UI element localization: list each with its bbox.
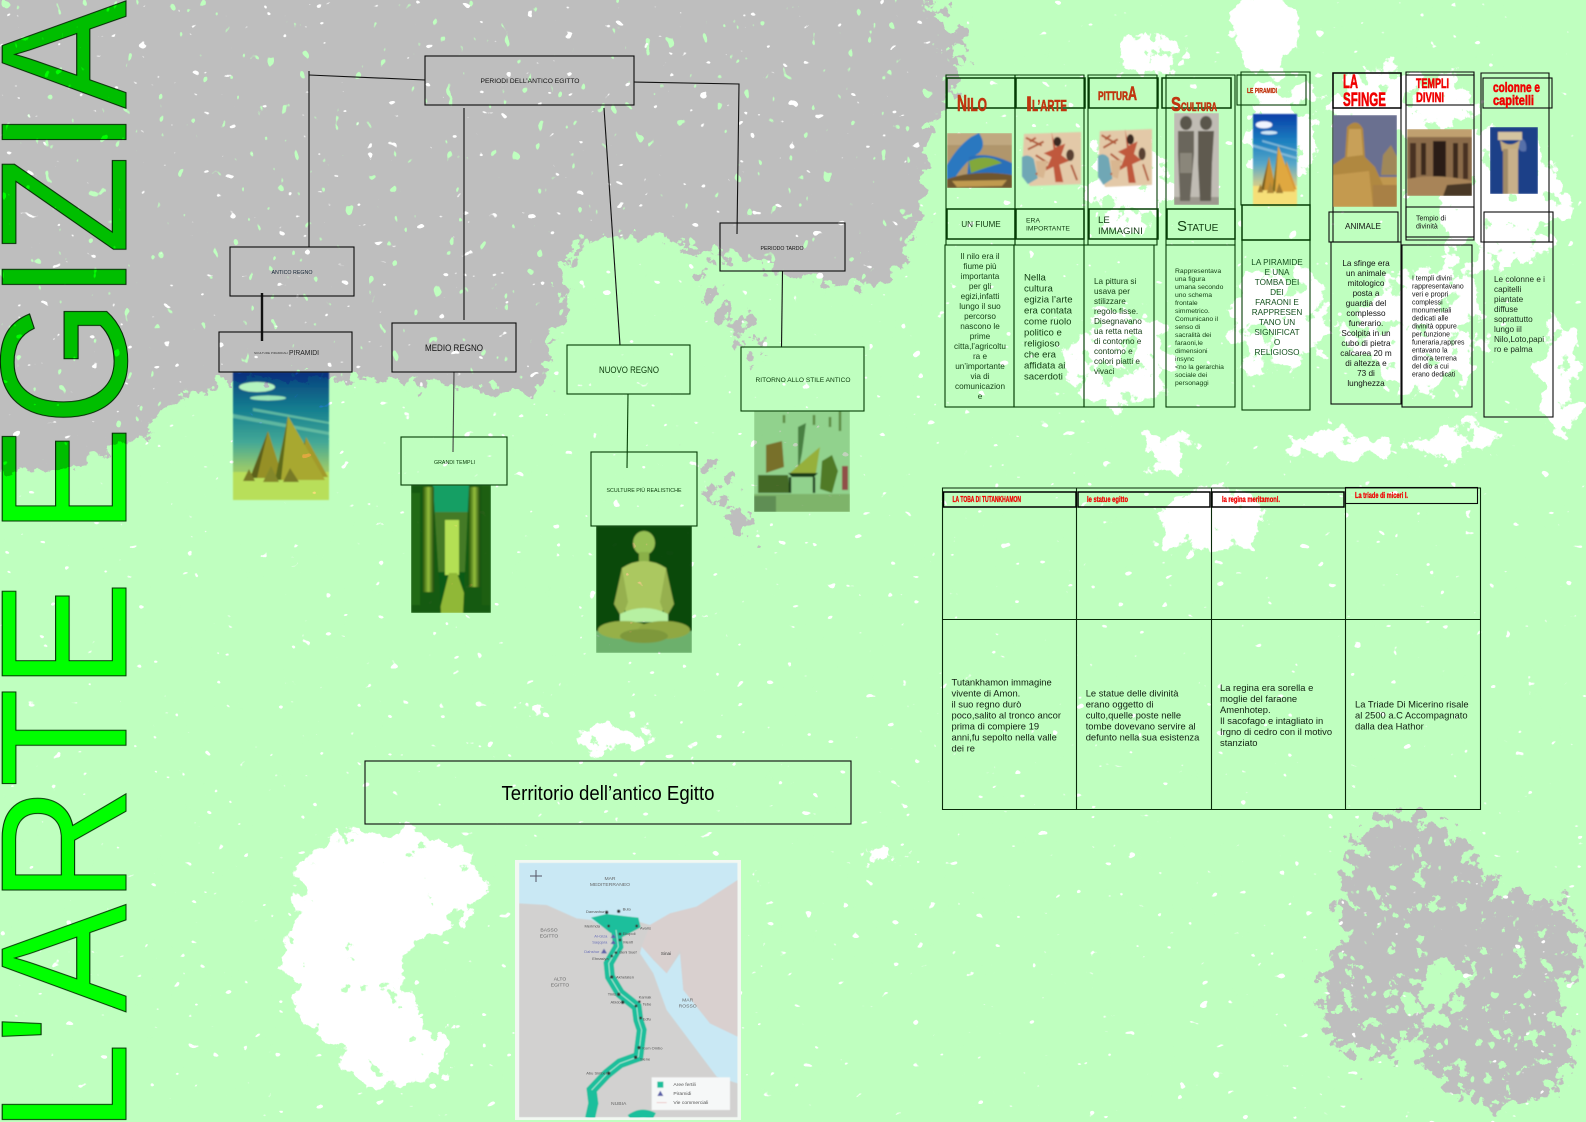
column 3: queen Meritamon: Irgno di cedro con il motivo (1220, 726, 1332, 737)
text: colonne (1484, 242, 1553, 417)
column 4: triad of Mycerinus: dalla dea Hathor (1355, 720, 1424, 731)
column 1: tomb of Tutankhamon: prima di compiere 19 (952, 720, 1039, 731)
node: antico regno: ANTICO REGNO (272, 270, 313, 276)
title: colonne e capitelli: capitelli (1493, 92, 1534, 108)
text: nilo: ra e (973, 352, 988, 361)
text: sfinge: Scolpita in un (1341, 329, 1391, 338)
subtitle: le immagini: IMMAGINI (1098, 226, 1143, 237)
title: scultura: S (1171, 94, 1181, 116)
node: ritorno allo stile antico: RITORNO ALLO STILE ANTICO (756, 377, 851, 384)
text: arte: affidata ai (1024, 360, 1065, 372)
text: templi: I templi divini (1412, 276, 1452, 282)
column 2: statues: culto,quelle poste nelle (1086, 709, 1181, 720)
text: sfinge: lunghezza (1347, 379, 1385, 388)
title: colonne e capitelli: colonne e (1493, 79, 1540, 95)
image: couple statue (1174, 113, 1219, 205)
map of ancient Egypt: Ehnasiya (592, 956, 609, 961)
column 4: triad of Mycerinus: al 2500 a.C Accompagnato (1355, 709, 1468, 720)
column 2: statues: erano oggetto di (1086, 698, 1153, 709)
map of ancient Egypt: Siene (640, 1056, 651, 1061)
map of ancient Egypt: Saqqara (592, 940, 608, 945)
image: pyramids left (233, 372, 329, 500)
title: pittura: A (1128, 84, 1137, 105)
title: nilo: ILO (967, 95, 987, 115)
map of ancient Egypt: Eliopoli (623, 931, 636, 936)
text: colonne: piantate (1494, 295, 1524, 304)
node: nuovo regno (567, 345, 690, 394)
map of ancient Egypt: MAR (604, 876, 616, 882)
text: sfinge: La sfinge era (1342, 259, 1390, 268)
subtitle: animale: ANIMALE (1345, 222, 1382, 231)
column 2: statues: le statue egitto (1087, 495, 1128, 504)
column 1: tomb of Tutankhamon (944, 492, 1076, 753)
title: le piramidi: LE PIRAMIDI (1247, 88, 1277, 95)
text: arte: cultura (1024, 284, 1053, 294)
text: nilo: fiume più (963, 262, 997, 271)
text: pittura (1084, 245, 1154, 407)
text: nilo: citta,l’agricoltu (954, 342, 1006, 351)
text: templi (1402, 245, 1472, 407)
title: la sfinge: SFINGE (1343, 90, 1386, 111)
text: scultura: <no la gerarchia (1175, 364, 1224, 371)
map of ancient Egypt: Tinis (608, 991, 616, 996)
text: pittura: di contorno e (1094, 337, 1142, 346)
text: sfinge: cubo di pietra (1341, 339, 1391, 348)
subtitle: tempio di divinità: Tempio di (1416, 216, 1446, 222)
panel: nilo (945, 75, 1015, 407)
map of ancient Egypt: ALTO (554, 977, 566, 983)
map of ancient Egypt: Tebe (643, 1001, 652, 1006)
map of ancient Egypt: Abu Simbel (586, 1071, 607, 1076)
map of ancient Egypt: Beni Suef (619, 950, 638, 955)
title: arte: L’ARTE (1032, 98, 1067, 115)
text: piramide: TOMBA DEI (1255, 278, 1299, 287)
column 4: triad of Mycerinus: La triade di miceri I. (1355, 491, 1408, 500)
text: piramide: LA PIRAMIDE (1251, 258, 1303, 267)
text: arte: era contata (1024, 306, 1073, 316)
text: pittura: vivaci (1094, 367, 1115, 376)
column 1: tomb of Tutankhamon: Tutankhamon immagine (952, 676, 1052, 687)
column 2: statues: defunto nella sua esistenza (1086, 731, 1200, 742)
text: pittura: stilizzare (1094, 297, 1126, 306)
text: scultura: una figura (1175, 276, 1205, 283)
image: pyramids (1253, 114, 1297, 206)
text: pittura: usava per (1094, 287, 1130, 296)
map of ancient Egypt: Buto (623, 906, 632, 911)
text: templi: del dio a cui (1412, 364, 1449, 370)
text: templi: complessi (1412, 300, 1443, 306)
subtitle: tempio di divinità (1406, 207, 1474, 237)
text: scultura: Comunicano il (1175, 316, 1219, 323)
title: la sfinge: LA (1343, 72, 1358, 93)
column 4: triad of Mycerinus (1346, 488, 1478, 731)
subtitle box: empty (1484, 212, 1553, 242)
map of ancient Egypt: MAR (682, 998, 694, 1004)
node: sculture più realistiche (591, 452, 697, 526)
text: piramide: FARAONI E (1255, 298, 1299, 307)
text: sfinge: guardia del (1346, 299, 1386, 308)
compass (530, 870, 542, 882)
text: scultura (1166, 245, 1235, 407)
text: scultura: dimensioni (1175, 348, 1208, 355)
table: works of Egyptian art (942, 488, 1480, 810)
text: scultura: sacralità dei (1175, 332, 1212, 339)
panel: piramidi (1237, 72, 1310, 410)
panel: territory heading (365, 761, 851, 824)
text: arte: che era (1024, 350, 1057, 360)
column 3: queen Meritamon: la regina meritamonl. (1222, 495, 1280, 504)
node: piramidi: SCULTURE PIRAMIDALI (254, 351, 288, 355)
text: colonne: capitelli (1494, 285, 1521, 294)
text: colonne: Nilo,Loto,papi (1494, 335, 1544, 344)
text: scultura: senso di (1175, 324, 1201, 331)
panel: templi divini (1402, 72, 1474, 407)
text: scultura: frontale (1175, 300, 1198, 307)
image: temple (1407, 129, 1472, 196)
text: piramide: RAPPRESEN (1252, 308, 1302, 317)
text: arte: politico e (1024, 328, 1062, 338)
image: nile river (947, 133, 1012, 188)
text: arte (1014, 245, 1084, 407)
subtitle: statue: STATUE (1177, 218, 1219, 235)
text: colonne: ro e palma (1494, 345, 1533, 354)
text: piramide: SIGNIFICAT (1254, 328, 1300, 337)
text: scultura: umana secondo (1175, 284, 1224, 291)
text: nilo: e (978, 392, 983, 401)
image: fresco (1022, 132, 1081, 186)
image: fresco (1098, 129, 1152, 187)
text: nilo: importanta (961, 272, 1000, 281)
column 1: tomb of Tutankhamon: anni,fu sepolto nella valle (952, 731, 1057, 742)
column 2: statues: Le statue delle divinità (1086, 687, 1179, 698)
subtitle: era importante: ERA (1026, 218, 1040, 224)
text: piramide (1242, 240, 1310, 410)
text: templi: erano dedicati (1412, 372, 1456, 378)
text: piramide: TANO UN (1259, 318, 1295, 327)
text: scultura: insync (1175, 356, 1195, 363)
text: nilo: via di (970, 372, 990, 381)
image: painted scene (754, 412, 850, 512)
text: nilo: prime (970, 332, 991, 341)
text: pittura: regolo fisse. (1094, 307, 1138, 316)
map of ancient Egypt: Al-Giza (594, 933, 608, 938)
text: pittura: La pittura si (1094, 277, 1137, 286)
map of ancient Egypt: Aree fertili (673, 1082, 696, 1088)
text: sfinge: funerario. (1349, 319, 1383, 328)
text: templi: dedicati alle (1412, 316, 1449, 322)
map of ancient Egypt (515, 860, 741, 1120)
map of ancient Egypt: ROSSO (679, 1004, 697, 1010)
title: templi divini: TEMPLI (1416, 75, 1449, 91)
text: arte: sacerdoti (1024, 372, 1063, 382)
map of ancient Egypt: Avaris (640, 925, 651, 930)
column 3: queen Meritamon: stanziato (1220, 737, 1258, 748)
column 2: statues: tombe dovevano servire al (1086, 720, 1196, 731)
node: grandi templi (401, 437, 507, 485)
subtitle: un fiume (947, 209, 1015, 239)
column 1: tomb of Tutankhamon: vivente di Amon. (952, 687, 1020, 698)
map of ancient Egypt: Damanhur (586, 909, 605, 914)
map of ancient Egypt: Piramidi (673, 1091, 691, 1097)
map of ancient Egypt: NUBIA (611, 1101, 627, 1107)
column 1: tomb of Tutankhamon: il suo regno durò (952, 698, 1021, 709)
text: arte: come ruolo (1024, 316, 1071, 328)
title: nilo: N (957, 90, 967, 116)
text: templi: divinità oppure (1412, 324, 1457, 330)
node: periodo tardo (720, 223, 845, 271)
connector lines (262, 71, 782, 468)
node: periodo tardo: PERIODO TARDO (760, 246, 804, 252)
subtitle: animale (1329, 212, 1398, 242)
text: scultura: personaggi (1175, 380, 1209, 387)
text: arte: egizia l’arte (1024, 294, 1073, 306)
map of ancient Egypt: Merimda (584, 923, 601, 928)
text: sfinge (1331, 242, 1401, 404)
text: arte: Nella (1024, 272, 1047, 284)
column 3: queen Meritamon: La regina era sorella e (1220, 682, 1313, 693)
map of ancient Egypt: Vie commerciali (673, 1100, 708, 1106)
column 3: queen Meritamon (1212, 492, 1344, 748)
map of ancient Egypt: EGITTO (540, 934, 558, 940)
column 3: queen Meritamon: moglie del faraone (1220, 693, 1297, 704)
node: piramidi: PIRAMIDI (289, 348, 319, 357)
text: sfinge: calcarea 20 m (1340, 349, 1392, 358)
map of ancient Egypt: Edfu (643, 1017, 651, 1022)
text: pittura: Disegnavano (1094, 317, 1142, 326)
map of ancient Egypt: MEDITERRANEO (590, 882, 630, 888)
image: sphinx (1333, 115, 1397, 207)
text: templi: funeraria,rappres (1412, 340, 1465, 346)
map of ancient Egypt: Karnak (639, 995, 651, 1000)
text: scultura: sociale dei (1175, 372, 1208, 379)
text: nilo: comunicazion (955, 382, 1005, 391)
panel: scultura (1162, 75, 1235, 407)
map of ancient Egypt: EGITTO (551, 983, 569, 989)
text: sfinge: 73 di (1357, 369, 1375, 378)
text: nilo: percorso (964, 312, 996, 321)
subtitle: le immagini (1089, 209, 1158, 239)
text: piramide: RELIGIOSO (1254, 348, 1300, 357)
text: templi: entavano la (1412, 348, 1448, 354)
text: sfinge: complesso (1346, 309, 1386, 318)
text: templi: per funzione (1412, 332, 1450, 338)
title: arte: I (1026, 93, 1032, 116)
text: sfinge: posta a (1353, 289, 1380, 298)
text: nilo: nascono le (960, 322, 1000, 331)
text: colonne: diffuse (1494, 305, 1518, 314)
column 1: tomb of Tutankhamon: poco,salito al tronco ancor (952, 709, 1061, 720)
text: colonne: lungo iil (1494, 325, 1522, 334)
map of ancient Egypt: Dahshur (584, 949, 600, 954)
title: templi divini: DIVINI (1416, 89, 1444, 105)
text: piramide: O (1274, 338, 1280, 347)
text: sfinge: mitologico (1348, 279, 1385, 288)
node: ritorno allo stile antico (741, 347, 864, 411)
text: piramide: DEI (1270, 288, 1284, 297)
image: seated scribe (596, 526, 692, 653)
text: templi: monumentali (1412, 308, 1452, 314)
panel: colonne e capitelli (1481, 73, 1553, 417)
subtitle: le immagini: LE (1098, 215, 1110, 226)
text: arte: religioso (1024, 338, 1060, 350)
concept map: periods of ancient Egypt (219, 56, 864, 653)
text: sfinge: di altezza e (1345, 359, 1387, 368)
subtitle: statue (1167, 209, 1235, 239)
text: piramide: E UNA (1264, 268, 1290, 277)
text: nilo: lungo il suo (959, 302, 1001, 311)
panel: territory heading: Territorio dell’antico Egitto (502, 783, 714, 805)
title: scultura: CULTURA (1181, 100, 1217, 114)
subtitle: tempio di divinità: divinità (1416, 224, 1438, 230)
text: nilo: egizi,infatti (961, 292, 1000, 301)
text: colonne: Le colonne e i (1494, 275, 1545, 284)
node: nuovo regno: NUOVO REGNO (599, 365, 659, 375)
subtitle box: empty (1242, 205, 1310, 240)
text: scultura: Rappresentava (1175, 268, 1221, 275)
node: antico regno (230, 247, 354, 296)
text: colonne: soprattutto (1494, 315, 1533, 324)
title: pittura: PITTUR (1098, 89, 1128, 103)
map of ancient Egypt: Akhetaten (616, 974, 634, 979)
text: sfinge: un animale (1346, 269, 1386, 278)
node: grandi templi: GRANDI TEMPLI (434, 460, 475, 466)
column 3: queen Meritamon: Il sacofago e intagliato in (1220, 715, 1323, 726)
text: pittura: colori piatti e (1094, 357, 1140, 366)
subtitle: un fiume: UN FIUME (961, 220, 1001, 229)
node: sculture più realistiche: SCULTURE PIÙ REALISTICHE (606, 487, 682, 494)
map of ancient Egypt: BASSO (540, 928, 558, 934)
subtitle: era importante: IMPORTANTE (1026, 226, 1070, 232)
text: pittura: contorno e (1094, 347, 1133, 356)
panel: arte (1014, 75, 1085, 407)
text: nilo: per gli (969, 282, 991, 291)
column frame (946, 75, 1015, 245)
node: medio regno: MEDIO REGNO (425, 343, 483, 353)
root box (425, 56, 634, 105)
table grid (942, 488, 1480, 810)
text: templi: dimora terrena (1412, 356, 1457, 362)
column 1: tomb of Tutankhamon: LA TOBA DI TUTANKHAMON (952, 495, 1021, 504)
subtitle: era importante (1016, 209, 1084, 239)
column 3: queen Meritamon: Amenhotep. (1220, 704, 1271, 715)
panel: sfinge (1329, 72, 1401, 404)
text: nilo: Il nilo era il (960, 252, 1000, 261)
text: scultura: simmetrico. (1175, 308, 1210, 315)
map of ancient Egypt: Menfi (623, 940, 633, 945)
column 4: triad of Mycerinus: La Triade Di Micerino risale (1355, 698, 1469, 709)
text: pittura: ua retta netta (1094, 327, 1143, 336)
text: nilo (945, 245, 1014, 407)
panel: pittura (1084, 75, 1158, 407)
text: nilo: un’importante (955, 362, 1005, 371)
node: piramidi (219, 332, 352, 372)
text: templi: rappresentavano (1412, 284, 1464, 290)
node: medio regno (392, 323, 516, 372)
map of ancient Egypt: Sinai (661, 951, 671, 956)
map of ancient Egypt: Abido (610, 1000, 621, 1005)
text: scultura: uno schema (1175, 292, 1212, 299)
map of ancient Egypt: Kom Ombo (642, 1045, 663, 1050)
column 2: statues (1078, 492, 1210, 742)
image: column (1490, 127, 1538, 194)
text: templi: veri e propri (1412, 292, 1449, 298)
image: temple corridor (411, 486, 491, 613)
text: scultura: faraoni,le (1175, 340, 1203, 347)
root box: PERIODI DELL’ANTICO EGITTO (480, 78, 580, 85)
column 1: tomb of Tutankhamon: dei re (952, 742, 975, 753)
